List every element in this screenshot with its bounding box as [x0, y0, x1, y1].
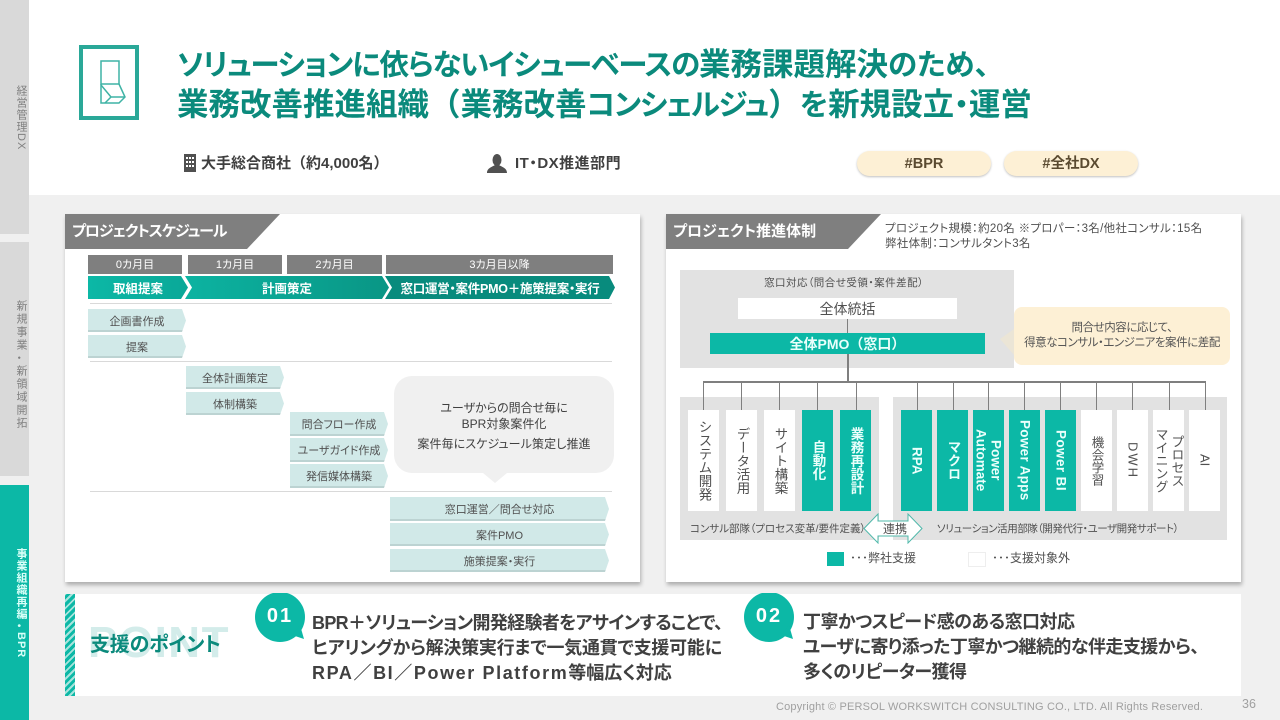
skill: サイト構築: [764, 410, 795, 511]
task: 発信媒体構築: 発信媒体構築: [306, 471, 372, 483]
skill: 自動化: [802, 410, 833, 511]
task: 発信媒体構築: [290, 464, 388, 488]
skill: Power Automate: Automate: [974, 429, 988, 492]
task: 問合フロー作成: [290, 412, 388, 436]
skill: AI: [1189, 410, 1220, 511]
legend: out of scope: ･･･支援対象外: [992, 551, 1070, 565]
callout: per-inquiry scheduling: ユーザからの問合せ毎に: [440, 401, 568, 415]
project scale note: [885, 222, 1202, 250]
task: 窓口運営／問合せ対応: 窓口運営／問合せ対応: [445, 504, 554, 516]
point text 01: RPA／BI／Power Platform等幅広く対応: [312, 663, 672, 683]
callout: per-inquiry scheduling: [394, 376, 614, 483]
panel: support points: [65, 594, 1241, 696]
legend: supported: ･･･弊社支援: [850, 551, 916, 565]
sidebar tab: 経営管理DX: [0, 0, 29, 234]
point text 02: 多くのリピーター獲得: [803, 662, 966, 682]
heading: project organization: [666, 214, 881, 249]
title: 業務改善推進組織（業務改善コンシェルジュ）を新規設立・運営: [177, 86, 1032, 122]
phase arrow: 窓口運営: [385, 276, 615, 299]
skill: サイト構築: サイト構築: [772, 427, 788, 494]
task: 体制構築: [186, 392, 284, 415]
arrow: collaboration: 連携: [883, 522, 907, 536]
badge: 01: 01: [267, 604, 293, 626]
skill: Power BI: Power BI: [1054, 430, 1068, 491]
month header: 1カ月目: 1カ月目: [216, 259, 254, 271]
tag: 全社DX: [1004, 151, 1138, 176]
heading: project schedule: [65, 214, 280, 249]
skill: プロセスマイニング: [1153, 410, 1184, 511]
tag: BPR: #BPR: [905, 156, 943, 172]
skill: データ活用: [726, 410, 757, 511]
skill: 業務再設計: [840, 410, 871, 511]
arrow: collaboration: [864, 513, 923, 544]
box: overall PMO: [710, 333, 985, 354]
panel: project organization: [666, 214, 1241, 582]
skill: DWH: DWH: [1126, 442, 1140, 479]
legend: supported: [827, 551, 916, 566]
skill: Power Apps: Power Apps: [1018, 420, 1032, 501]
icon: person: [487, 154, 507, 173]
skill: プロセスマイニング: プロセス: [1170, 434, 1184, 486]
callout: per-inquiry scheduling: 案件毎にスケジュール策定し推進: [417, 437, 591, 451]
skill: プロセスマイニング: マイニング: [1154, 428, 1168, 493]
contact desk group: [680, 270, 1014, 368]
task: 全体計画策定: 全体計画策定: [202, 372, 268, 384]
skill: Power BI: [1045, 410, 1076, 511]
month header: 0カ月目: 0カ月目: [116, 259, 154, 271]
phase arrow: 取組提案: [88, 276, 188, 299]
task: 企画書作成: [88, 309, 186, 332]
task: 企画書作成: 企画書作成: [110, 316, 164, 328]
project scale note: 弊社体制：コンサルタント3名: [885, 238, 1031, 250]
connector lines: [703, 319, 1206, 397]
skill: RPA: [901, 410, 932, 511]
copyright: Copyright © PERSOL WORKSWITCH CONSULTING CO., LTD. All Rights Reserved.: [776, 701, 1203, 713]
callout: assignment note: [1000, 307, 1230, 365]
task: 案件PMO: [390, 523, 609, 546]
task: 提案: [88, 335, 186, 358]
skill: DWH: [1117, 410, 1148, 511]
title: ソリューションに依らないイシューベースの業務課題解決のため、: [177, 46, 989, 82]
phase arrow: 計画策定: [185, 276, 389, 299]
skill: Power Automate: [973, 410, 1004, 511]
skill: 機会学習: [1081, 410, 1112, 511]
phase arrow: 取組提案: 取組提案: [113, 282, 163, 296]
task: 体制構築: 体制構築: [213, 398, 257, 410]
client department: IT・DX推進部門: [515, 155, 621, 172]
task: ユーザガイド作成: ユーザガイド作成: [298, 445, 380, 457]
task: ユーザガイド作成: [290, 438, 388, 462]
sidebar tab: 経営管理DX: 経営管理DX: [15, 85, 27, 150]
month header: 3カ月目以降: [386, 255, 613, 274]
tag: BPR: [857, 151, 991, 176]
icon: light switch: [79, 45, 139, 120]
skill: マクロ: マクロ: [946, 440, 960, 481]
month header: 1カ月目: [188, 255, 282, 274]
title: [177, 46, 1032, 122]
callout: assignment note: 得意なコンサル・エンジニアを案件に差配: [1024, 337, 1220, 349]
panel: project schedule: [65, 214, 640, 582]
watermark: POINT: POINT: [88, 618, 230, 667]
task: 施策提案・実行: [390, 549, 609, 572]
point text 02: 丁寧かつスピード感のある窓口対応: [803, 612, 1074, 632]
task: 全体計画策定: [186, 366, 284, 389]
skill: システム開発: システム開発: [696, 420, 712, 501]
skill: Power Apps: [1009, 410, 1040, 511]
task: 提案: 提案: [126, 342, 148, 354]
group: consulting unit: [680, 397, 879, 540]
label: consulting unit: コンサル部隊（プロセス変革/要件定義）: [690, 523, 866, 535]
icon: building: [184, 154, 196, 172]
phase arrow: 計画策定: 計画策定: [262, 282, 312, 296]
header band: [29, 0, 1280, 195]
task: 施策提案・実行: 施策提案・実行: [464, 556, 535, 568]
task: 問合フロー作成: 問合フロー作成: [302, 419, 376, 431]
skill: 機会学習: 機会学習: [1090, 436, 1104, 486]
point text 01: ヒアリングから解決策実行まで一気通貫で支援可能に: [312, 638, 722, 658]
skill: 業務再設計: 業務再設計: [848, 427, 864, 494]
badge: 02: 02: [756, 604, 782, 626]
phase arrow: 窓口運営: 窓口運営・案件PMO＋施策提案・実行: [400, 282, 599, 296]
legend: out of scope: [968, 551, 1070, 567]
task: 窓口運営／問合せ対応: [390, 497, 609, 521]
heading: support points: 支援のポイント: [90, 634, 221, 656]
label: contact desk: 窓口対応（問合せ受領・案件差配）: [764, 277, 924, 289]
page number: 36: [1242, 697, 1256, 711]
sidebar tab: 事業組織再編・BPR: [0, 485, 29, 720]
sidebar tab: 新規事業・新領域開拓: [0, 242, 29, 476]
label: solution unit: ソリューション活用部隊（開発代行・ユーザ開発サポート）: [937, 523, 1178, 535]
tag: 全社DX: #全社DX: [1042, 156, 1100, 172]
heading: project schedule: プロジェクトスケジュール: [72, 223, 226, 240]
task: 案件PMO: 案件PMO: [476, 530, 523, 542]
point text 02: ユーザに寄り添った丁寧かつ継続的な伴走支援から、: [803, 637, 1199, 657]
month header: 2カ月目: [287, 255, 382, 274]
skill: Power Automate: Power: [988, 440, 1004, 481]
box: overall lead: 全体統括: [820, 300, 876, 316]
connector lines over groups: [703, 397, 1206, 410]
box: overall lead: [738, 298, 957, 319]
point text 01: [312, 613, 722, 683]
heading: project organization: プロジェクト推進体制: [673, 223, 816, 240]
month header: 0カ月目: [88, 255, 182, 274]
month header: 2カ月目: 2カ月目: [315, 259, 354, 271]
skill: データ活用: データ活用: [734, 427, 750, 494]
point text 02: [803, 612, 1199, 682]
skill: 自動化: 自動化: [810, 440, 826, 481]
callout: per-inquiry scheduling: BPR対象案件化: [462, 417, 546, 431]
skill: マクロ: [937, 410, 968, 511]
badge: 01: [255, 593, 305, 642]
skill: RPA: RPA: [910, 447, 924, 474]
client company: 大手総合商社（約4,000名）: [201, 155, 389, 172]
badge: 02: [744, 593, 794, 642]
project scale note: プロジェクト規模：約20名 ※プロパー：3名/他社コンサル：15名: [885, 223, 1202, 235]
point text 01: BPR＋ソリューション開発経験者をアサインすることで、: [312, 613, 722, 633]
stripe accent: [65, 594, 75, 696]
group: solution unit: [893, 397, 1227, 540]
callout: assignment note: 問合せ内容に応じて、: [1072, 322, 1172, 334]
month header: 3カ月目以降: 3カ月目以降: [469, 259, 530, 271]
sidebar tab: 事業組織再編・BPR: 事業組織再編・BPR: [15, 548, 27, 658]
box: overall PMO: 全体PMO（窓口）: [790, 336, 905, 352]
skill: システム開発: [688, 410, 719, 511]
sidebar tab: 新規事業・新領域開拓: 新規事業・新領域開拓: [15, 300, 27, 430]
skill: AI: AI: [1198, 454, 1212, 467]
